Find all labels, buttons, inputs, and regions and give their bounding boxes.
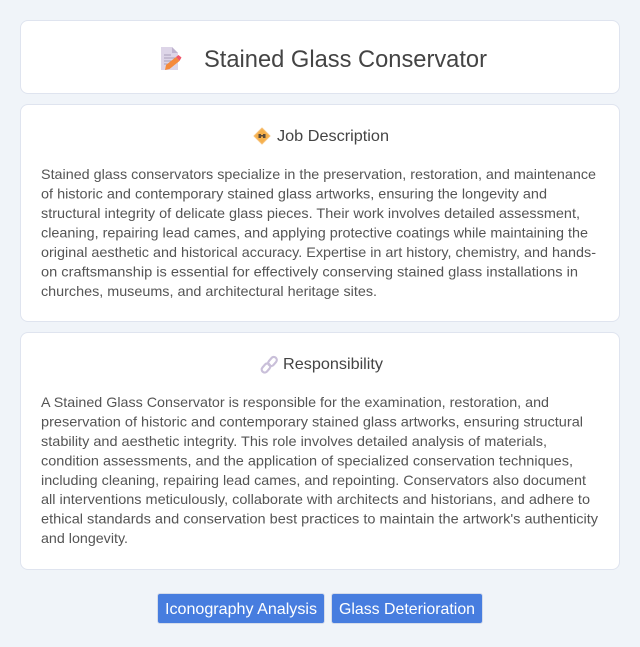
- text block: responsibility: all interventions meticulously, collaborate with architects and historians, and adhere to: [41, 491, 590, 507]
- tag: iconography analysis: [157, 593, 325, 624]
- tag label: glass deterioration: Glass Deterioration: [339, 601, 475, 618]
- tag label: iconography analysis: Iconography Analysis: [165, 601, 317, 618]
- text block: job description: cleaning, repairing lead cames, and applying protective coatings while maintaining the: [41, 224, 588, 240]
- title: Stained Glass Conservator: [204, 46, 487, 73]
- heading: job description: Job Description: [277, 128, 389, 145]
- text block: job description: Stained glass conservators specialize in the preservation, restoration, and maintenance: [41, 166, 596, 182]
- text block: responsibility: stability and aesthetic integrity. This role involves detailed analysis of materials,: [41, 433, 547, 449]
- panel: title: [20, 20, 620, 94]
- text block: job description: [41, 166, 596, 299]
- panel: job description: [20, 104, 620, 322]
- text block: responsibility: preservation of historic and contemporary stained glass artworks, ensuring structural: [41, 414, 583, 430]
- text block: job description: churches, museums, and architectural heritage sites.: [41, 283, 377, 299]
- heading: responsibility: Responsibility: [283, 356, 383, 373]
- text block: responsibility: condition assessments, and the application of specialized conservation techniques,: [41, 452, 573, 468]
- text block: responsibility: ethical standards and conservation best practices to maintain the artwork's authenticity: [41, 510, 598, 526]
- icon: document and pencil: [161, 47, 182, 70]
- panel: responsibility: [20, 332, 620, 570]
- text block: responsibility: A Stained Glass Conservator is responsible for the examination, restoration, and: [41, 394, 549, 410]
- text block: job description: original aesthetic and historical accuracy. Expertise in art history, chemistry, and hands-: [41, 244, 596, 260]
- text block: job description: on craftsmanship is essential for effectively conserving stained glass installations in: [41, 264, 578, 280]
- text block: responsibility: and longevity.: [41, 530, 128, 546]
- text block: responsibility: including cleaning, repairing lead cames, and repointing. Conservators also document: [41, 472, 586, 488]
- icon: chain link: [260, 356, 278, 374]
- text block: job description: structural integrity of delicate glass pieces. Their work involves detailed assessment,: [41, 205, 580, 221]
- text block: responsibility: [41, 394, 598, 546]
- icon: job description diamond: [254, 128, 270, 144]
- tag: glass deterioration: [331, 593, 483, 624]
- text block: job description: of historic and contemporary stained glass artworks, ensuring the longevity and: [41, 186, 547, 202]
